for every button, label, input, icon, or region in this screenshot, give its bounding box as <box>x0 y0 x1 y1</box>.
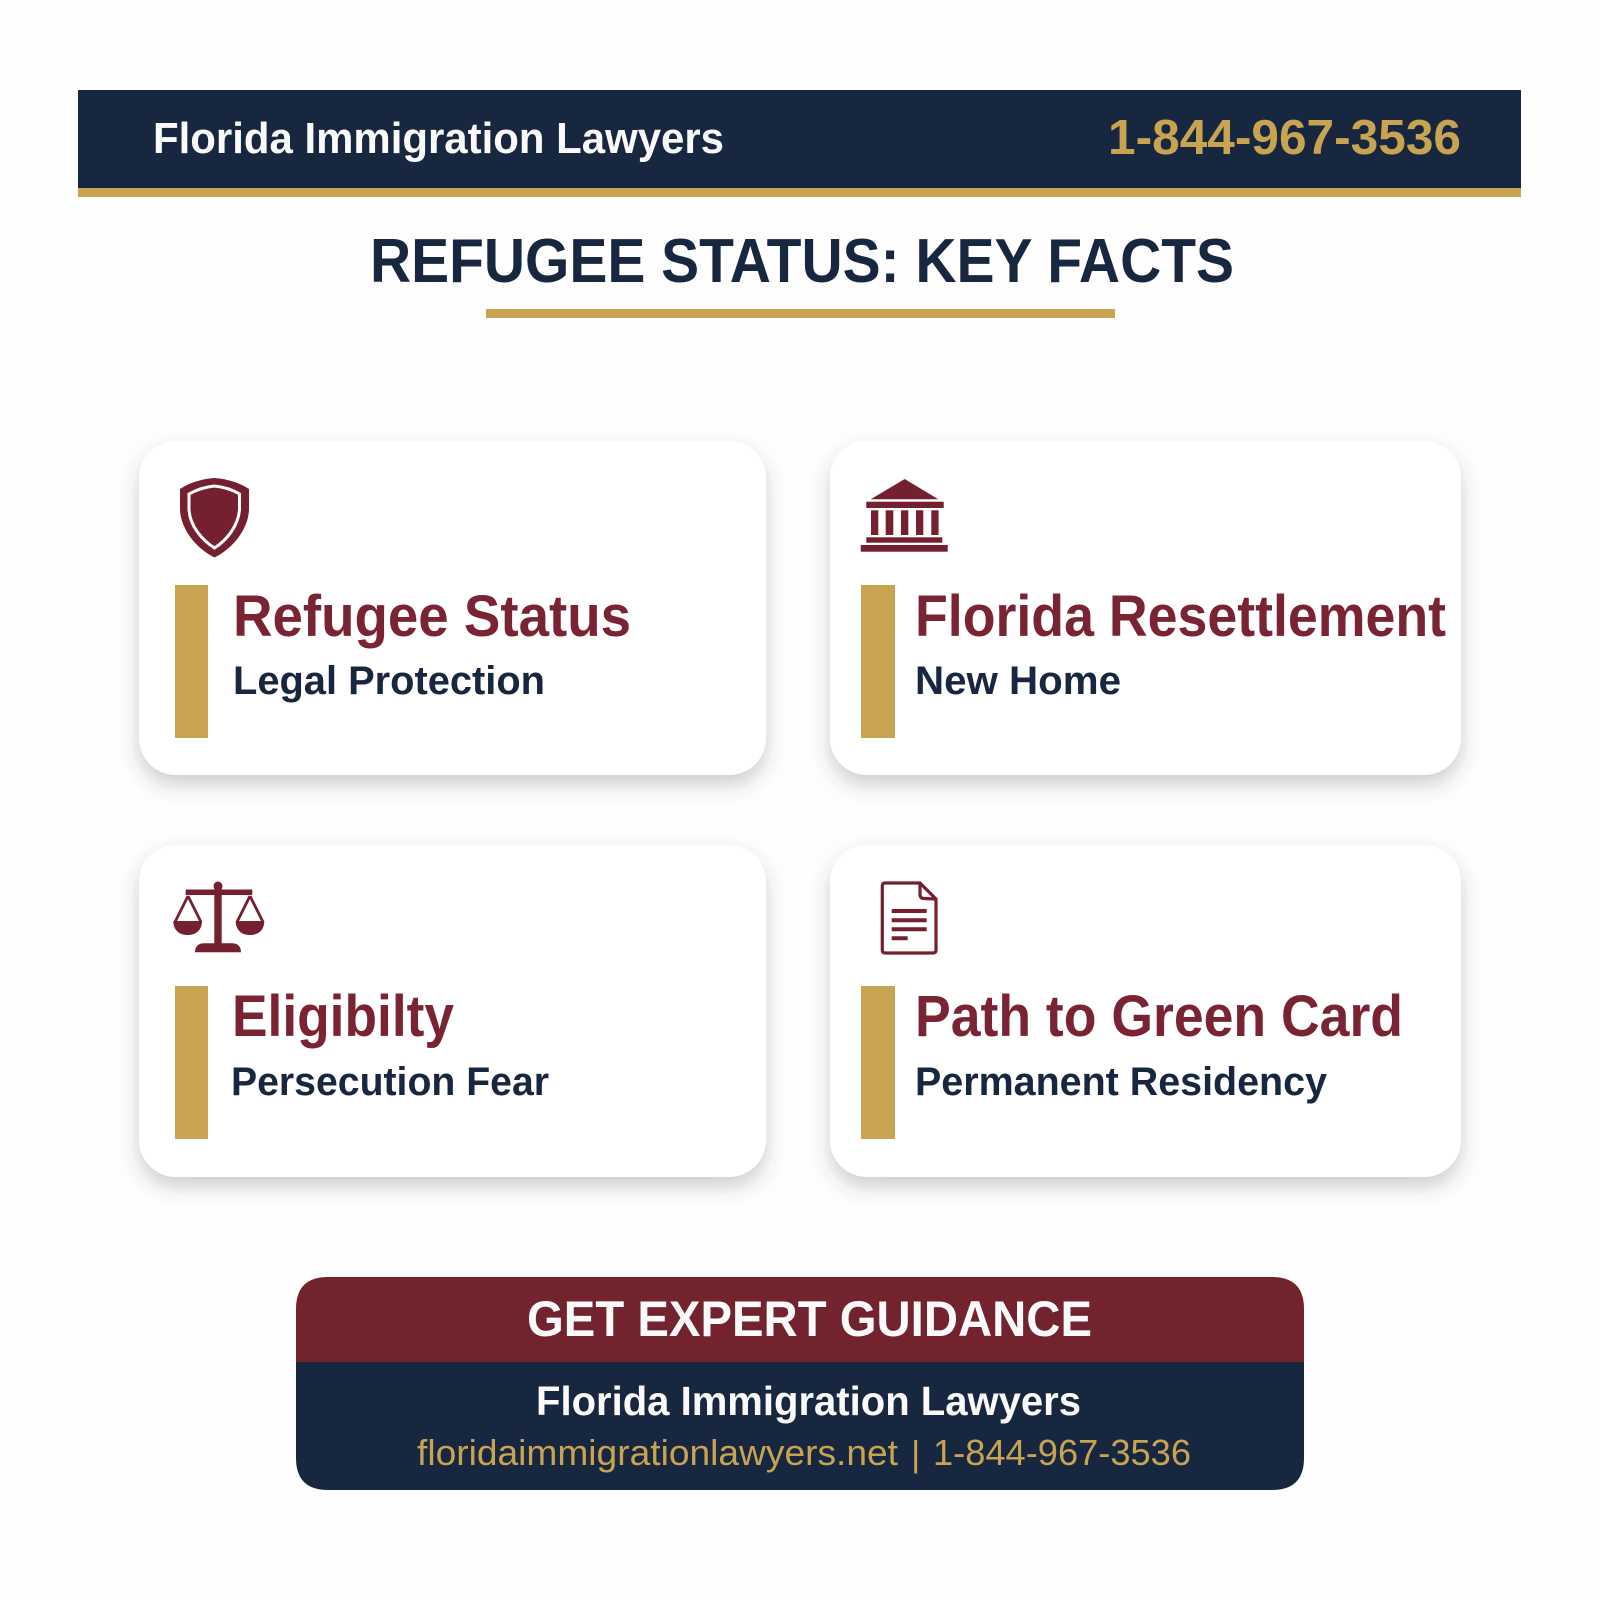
panel: path to green card <box>830 845 1461 1177</box>
icon: scales of justice <box>173 882 264 952</box>
accent bar <box>861 585 895 738</box>
accent bar <box>861 986 895 1139</box>
card heading: Refugee Status <box>233 584 631 649</box>
icon: document <box>882 883 936 953</box>
firm name: Florida Immigration Lawyers <box>536 1378 1081 1424</box>
accent bar <box>175 585 208 738</box>
website and phone: floridaimmigrationlawyers.net <box>417 1432 898 1473</box>
title underline <box>486 309 1115 318</box>
card subheading: Legal Protection <box>233 659 545 703</box>
call to action heading: GET EXPERT GUIDANCE <box>527 1291 1092 1347</box>
accent bar <box>175 986 208 1139</box>
icon: shield <box>180 478 249 558</box>
website and phone: | <box>911 1433 920 1474</box>
title: REFUGEE STATUS: KEY FACTS <box>370 227 1234 296</box>
card heading: Path to Green Card <box>915 984 1403 1049</box>
header bar <box>78 90 1521 197</box>
panel: florida resettlement <box>830 441 1461 775</box>
icon: courthouse <box>861 479 948 552</box>
card subheading: Permanent Residency <box>915 1060 1328 1104</box>
header phone number: 1-844-967-3536 <box>1108 111 1461 165</box>
call to action panel <box>296 1277 1304 1490</box>
card subheading: Persecution Fear <box>231 1060 549 1104</box>
card heading: Florida Resettlement <box>915 584 1446 649</box>
website and phone: 1-844-967-3536 <box>933 1432 1191 1473</box>
panel: refugee status <box>139 441 766 775</box>
panel: eligibility <box>139 845 766 1177</box>
website and phone <box>417 1432 1191 1474</box>
card heading: Eligibilty <box>232 984 454 1049</box>
header firm name: Florida Immigration Lawyers <box>153 114 724 163</box>
card subheading: New Home <box>915 659 1121 703</box>
